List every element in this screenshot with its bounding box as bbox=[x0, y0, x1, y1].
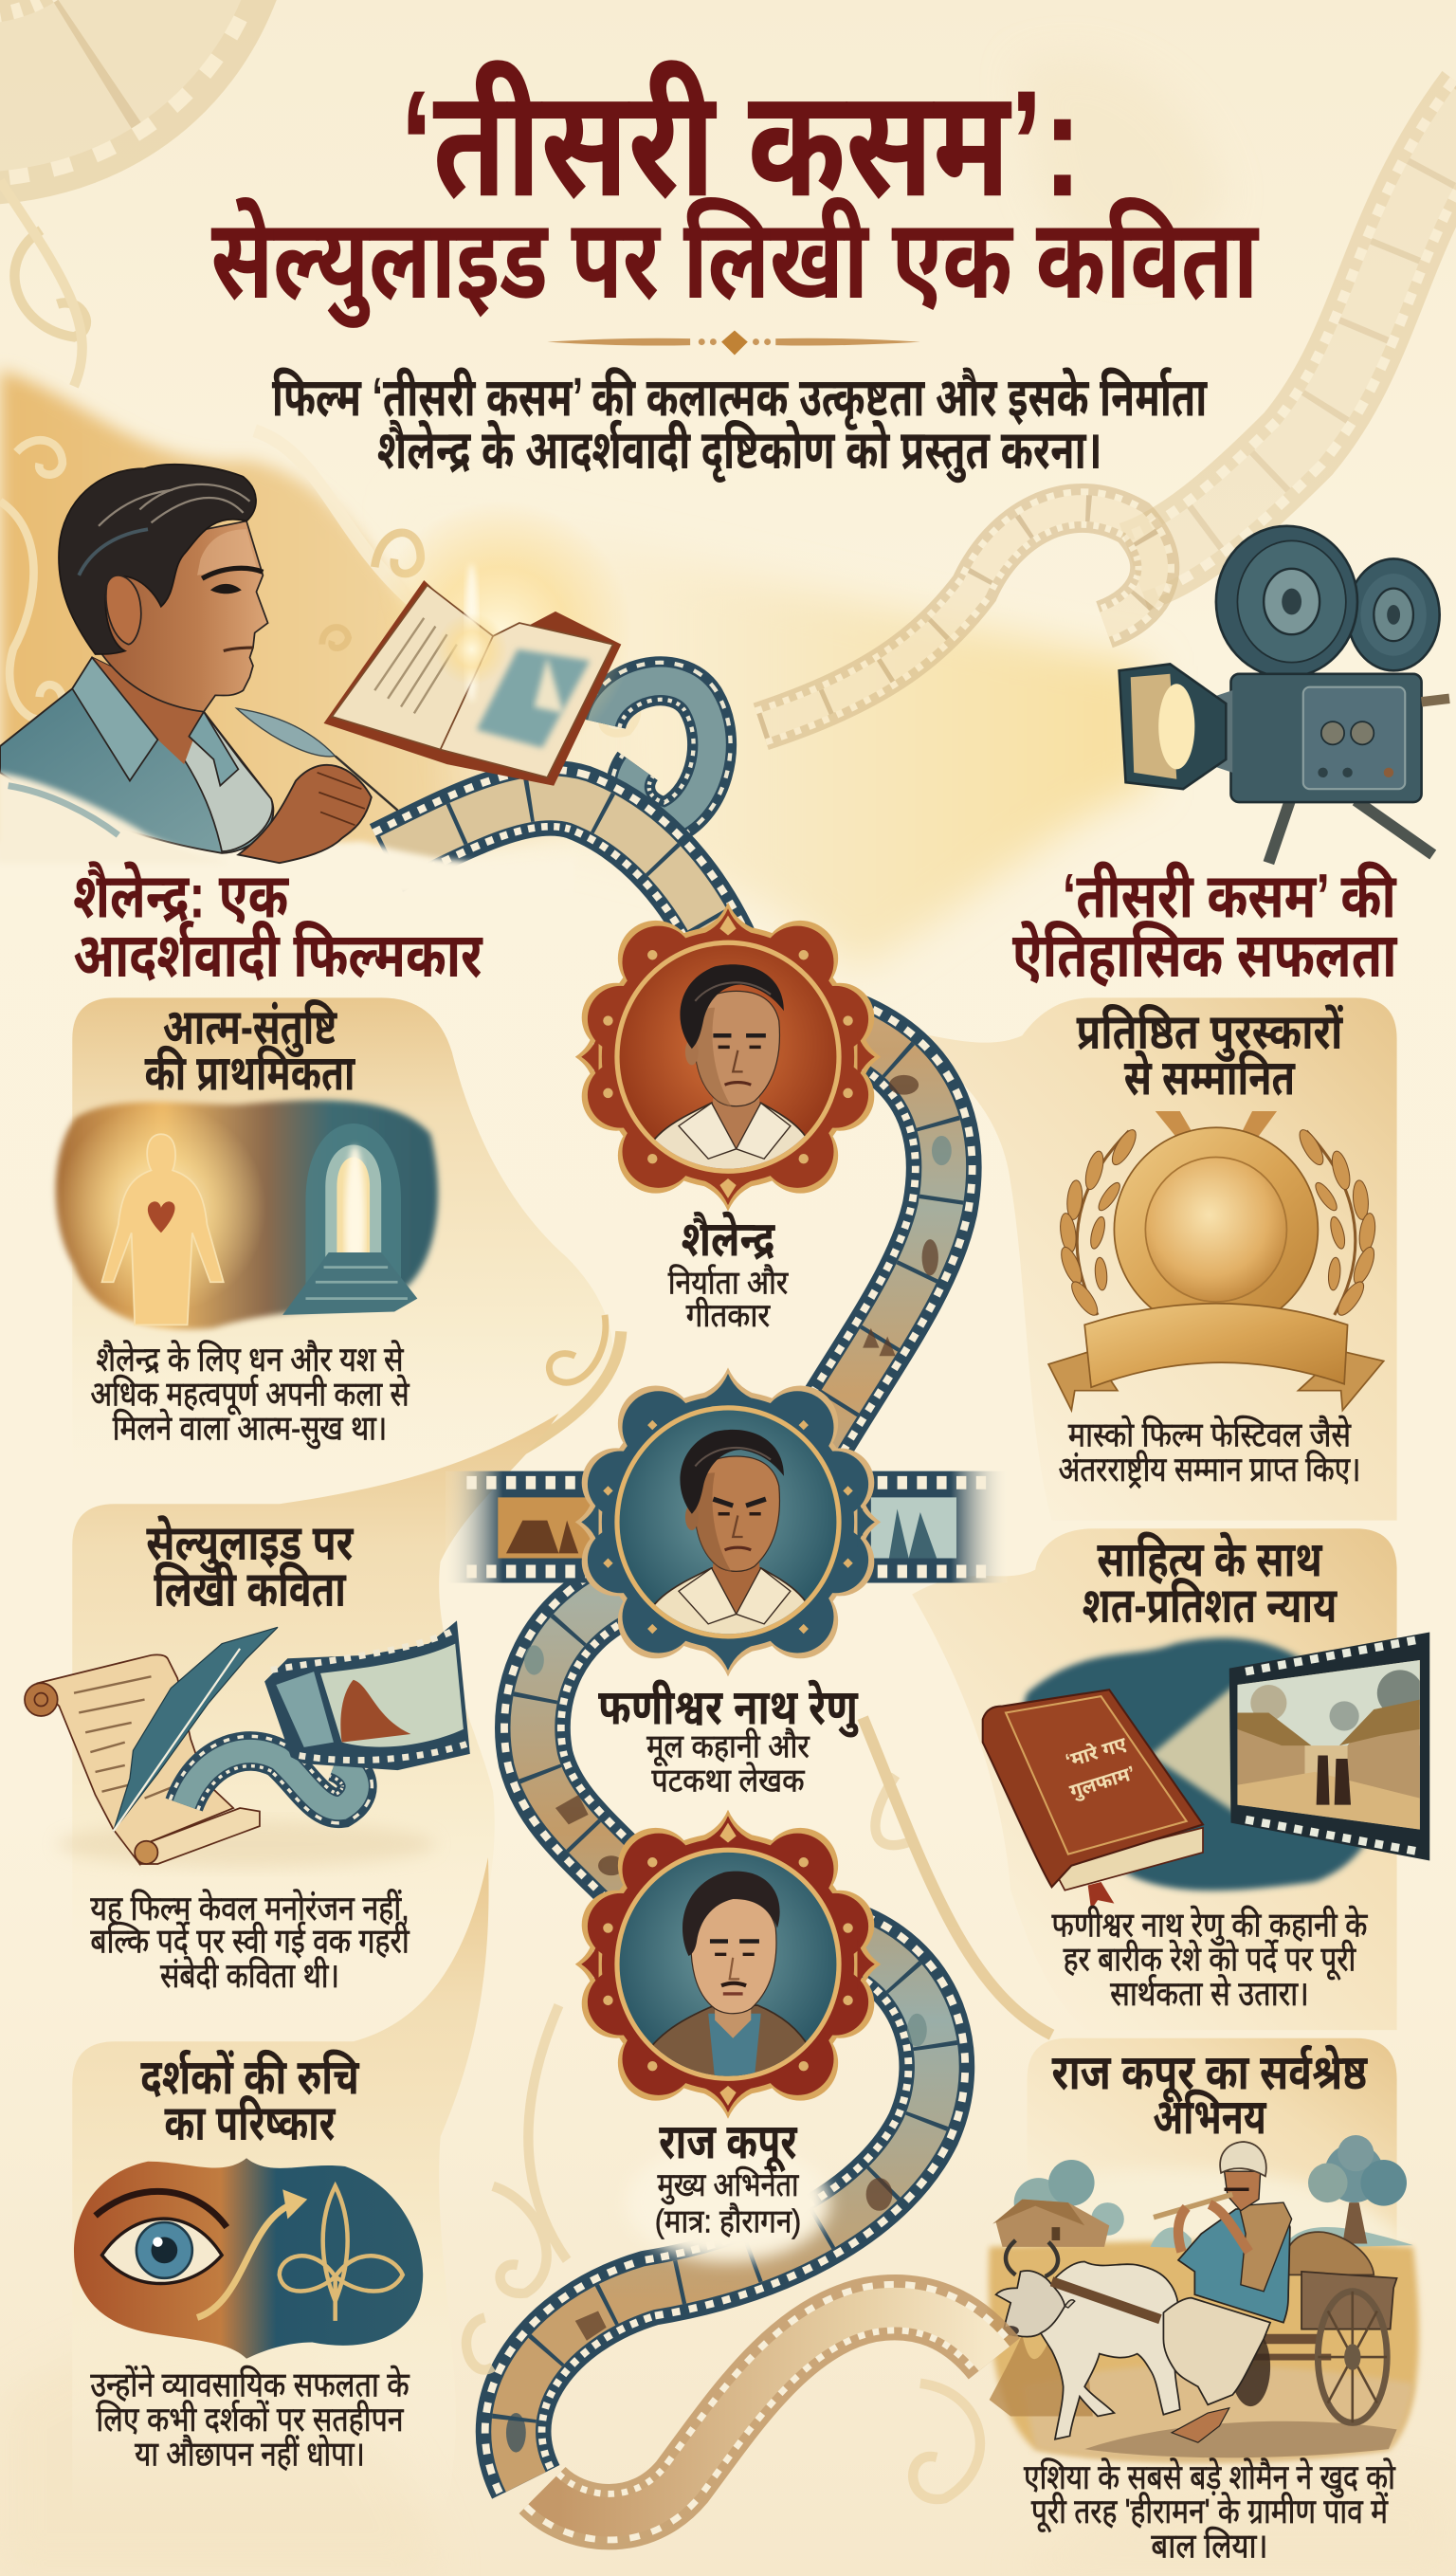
panel heading bbox=[146, 1515, 355, 1617]
panel text bbox=[1052, 1905, 1368, 2013]
panel heading: लिखी कविता bbox=[154, 1562, 347, 1617]
medallion: Raj Kapoor bbox=[575, 1810, 881, 2119]
illustration: gold medal with laurel bbox=[1048, 1111, 1384, 1410]
panel: self-satisfaction bbox=[56, 997, 621, 1504]
panel heading: से सम्मानित bbox=[1124, 1050, 1296, 1106]
cream fade behind Raj Kapoor label bbox=[627, 2144, 829, 2262]
central film strip bbox=[506, 1022, 994, 2517]
panel heading: प्रतिष्ठित पुरस्कारों bbox=[1077, 1004, 1344, 1063]
panel heading bbox=[1052, 2044, 1369, 2145]
label: Raj Kapoor bbox=[655, 2114, 801, 2239]
panel heading bbox=[140, 2050, 360, 2151]
panel heading: की प्राथमिकता bbox=[145, 1045, 356, 1101]
title: ‘तीसरी कसम’: bbox=[400, 59, 1083, 228]
subtitle: शैलेन्द्र के आदर्शवादी दृष्टिकोण को प्रस्तुत करना। bbox=[377, 418, 1101, 484]
illustration: novel projected onto film: गुलफाम’ bbox=[1067, 1763, 1138, 1803]
golden swirl backdrop bbox=[0, 181, 657, 855]
illustration: writer portrait bbox=[0, 465, 398, 863]
cream swoosh over lower edge of hero art bbox=[0, 836, 575, 896]
panel text bbox=[1058, 1416, 1360, 1489]
panel text: संबेदी कविता थी। bbox=[160, 1956, 339, 1995]
label: Raj Kapoor: (मात्र: हौरागन) bbox=[655, 2201, 801, 2239]
label: Shailendra: निर्याता और bbox=[668, 1263, 789, 1301]
illustration: glowing open book bbox=[324, 502, 632, 786]
panel text bbox=[1024, 2457, 1395, 2566]
panel text: मास्को फिल्म फेस्टिवल जैसे bbox=[1068, 1416, 1352, 1454]
panel: justice to literature bbox=[912, 1528, 1429, 2030]
panel: refining audience taste bbox=[72, 1857, 489, 2515]
panel heading: दर्शकों की रुचि bbox=[140, 2050, 360, 2106]
panel heading bbox=[145, 1000, 356, 1101]
panel text: सार्थकता से उतारा। bbox=[1110, 1974, 1309, 2013]
panel text bbox=[90, 1889, 410, 1995]
label: Shailendra: शैलेन्द्र bbox=[682, 1212, 775, 1268]
panel heading: शत-प्रतिशत न्याय bbox=[1083, 1579, 1338, 1634]
panel heading: सेल्युलाइड पर bbox=[146, 1515, 355, 1574]
panel heading: अभिनय bbox=[1153, 2090, 1266, 2145]
horizontal film strip behind centre medallion bbox=[446, 1471, 1008, 1583]
illustration: cine camera bbox=[1119, 526, 1449, 863]
film strip: under the book bbox=[386, 681, 731, 970]
panel heading bbox=[1083, 1532, 1338, 1634]
panel text: बाल लिया। bbox=[1151, 2527, 1267, 2566]
panel: Raj Kapoor performance bbox=[989, 2038, 1419, 2566]
panel text: अंतरराष्ट्रीय सम्मान प्राप्त किए। bbox=[1058, 1450, 1360, 1489]
subtitle bbox=[272, 367, 1208, 484]
panel text: मिलने वाला आत्म-सुख था। bbox=[113, 1409, 387, 1450]
panel text: या औछापन नहीं धोपा। bbox=[135, 2434, 365, 2473]
medallion: Phanishwar Nath Renu bbox=[575, 1367, 881, 1676]
heading: right column bbox=[1012, 860, 1398, 990]
label: Shailendra bbox=[668, 1212, 789, 1334]
illustration: eye and lotus knot bbox=[74, 2158, 423, 2359]
label: Phanishwar Nath Renu: पटकथा लेखक bbox=[651, 1762, 806, 1800]
curled background film strip bbox=[761, 508, 1155, 726]
illustration: glowing figure and doorway bbox=[56, 1100, 438, 1329]
label: Raj Kapoor: राज कपूर bbox=[659, 2114, 798, 2172]
panel: poem on celluloid bbox=[25, 1414, 558, 2021]
panel heading bbox=[1077, 1004, 1344, 1106]
decorative swirls near the film tail bbox=[466, 1718, 1052, 2499]
illustration: scroll and quill with film bbox=[25, 1620, 470, 1867]
panel text: शैलेन्द्र के लिए धन और यश से bbox=[96, 1340, 405, 1379]
panel text: यह फिल्म केवल मनोरंजन नहीं, bbox=[90, 1889, 410, 1927]
panel text: उन्होंने व्यावसायिक सफलता के bbox=[90, 2366, 410, 2404]
projector light beam bbox=[394, 493, 1151, 970]
panel heading: साहित्य के साथ bbox=[1097, 1532, 1322, 1588]
illustration: flute player on bullock cart bbox=[989, 2135, 1419, 2461]
film frame scenes bbox=[506, 1075, 952, 2453]
heading: left column bbox=[73, 860, 483, 990]
panel heading: राज कपूर का सर्वश्रेष्ठ bbox=[1052, 2044, 1369, 2103]
illustration: novel projected onto film: ‘मारे गए bbox=[1063, 1732, 1129, 1772]
panel text: फणीश्वर नाथ रेणु की कहानी के bbox=[1052, 1905, 1368, 1946]
label: Phanishwar Nath Renu: मूल कहानी और bbox=[646, 1726, 810, 1766]
illustration: novel projected onto film bbox=[983, 1633, 1429, 1910]
panel text: लिए कभी दर्शकों पर सतहीपन bbox=[96, 2400, 404, 2439]
panel text: हर बारीक रेशे को पर्दे पर पूरी bbox=[1064, 1940, 1356, 1981]
label: Raj Kapoor: मुख्य अभिनेता bbox=[657, 2165, 799, 2204]
label: Phanishwar Nath Renu bbox=[598, 1680, 859, 1800]
label: Shailendra: गीतकार bbox=[686, 1296, 771, 1334]
heading: left column: शैलेन्द्र: एक bbox=[73, 860, 289, 930]
driver bbox=[1163, 2298, 1270, 2404]
title bbox=[211, 59, 1260, 328]
panel text: पूरी तरह 'हीरामन' के ग्रामीण पाव में bbox=[1031, 2492, 1389, 2532]
medallion: Shailendra bbox=[575, 903, 881, 1212]
panel: prestigious awards bbox=[887, 997, 1397, 1521]
bullock bbox=[1040, 2262, 1180, 2439]
panel text: अधिक महत्वपूर्ण अपनी कला से bbox=[90, 1374, 410, 1415]
heading: left column: आदर्शवादी फिल्मकार bbox=[73, 920, 483, 990]
panel text bbox=[90, 1340, 410, 1450]
grass clump bbox=[990, 2334, 1093, 2416]
panel heading: का परिष्कार bbox=[164, 2096, 336, 2151]
panel text bbox=[90, 2366, 410, 2473]
background film strip top right bbox=[1134, 99, 1456, 567]
background film strip top left bbox=[0, 0, 181, 99]
divider ornament bbox=[547, 330, 920, 355]
panel text: बल्कि पर्दे पर स्वी गई वक गहरी bbox=[90, 1922, 410, 1961]
label: Phanishwar Nath Renu: फणीश्वर नाथ रेणु bbox=[598, 1680, 859, 1739]
panel heading: आत्म-संतुष्टि bbox=[163, 1000, 338, 1058]
